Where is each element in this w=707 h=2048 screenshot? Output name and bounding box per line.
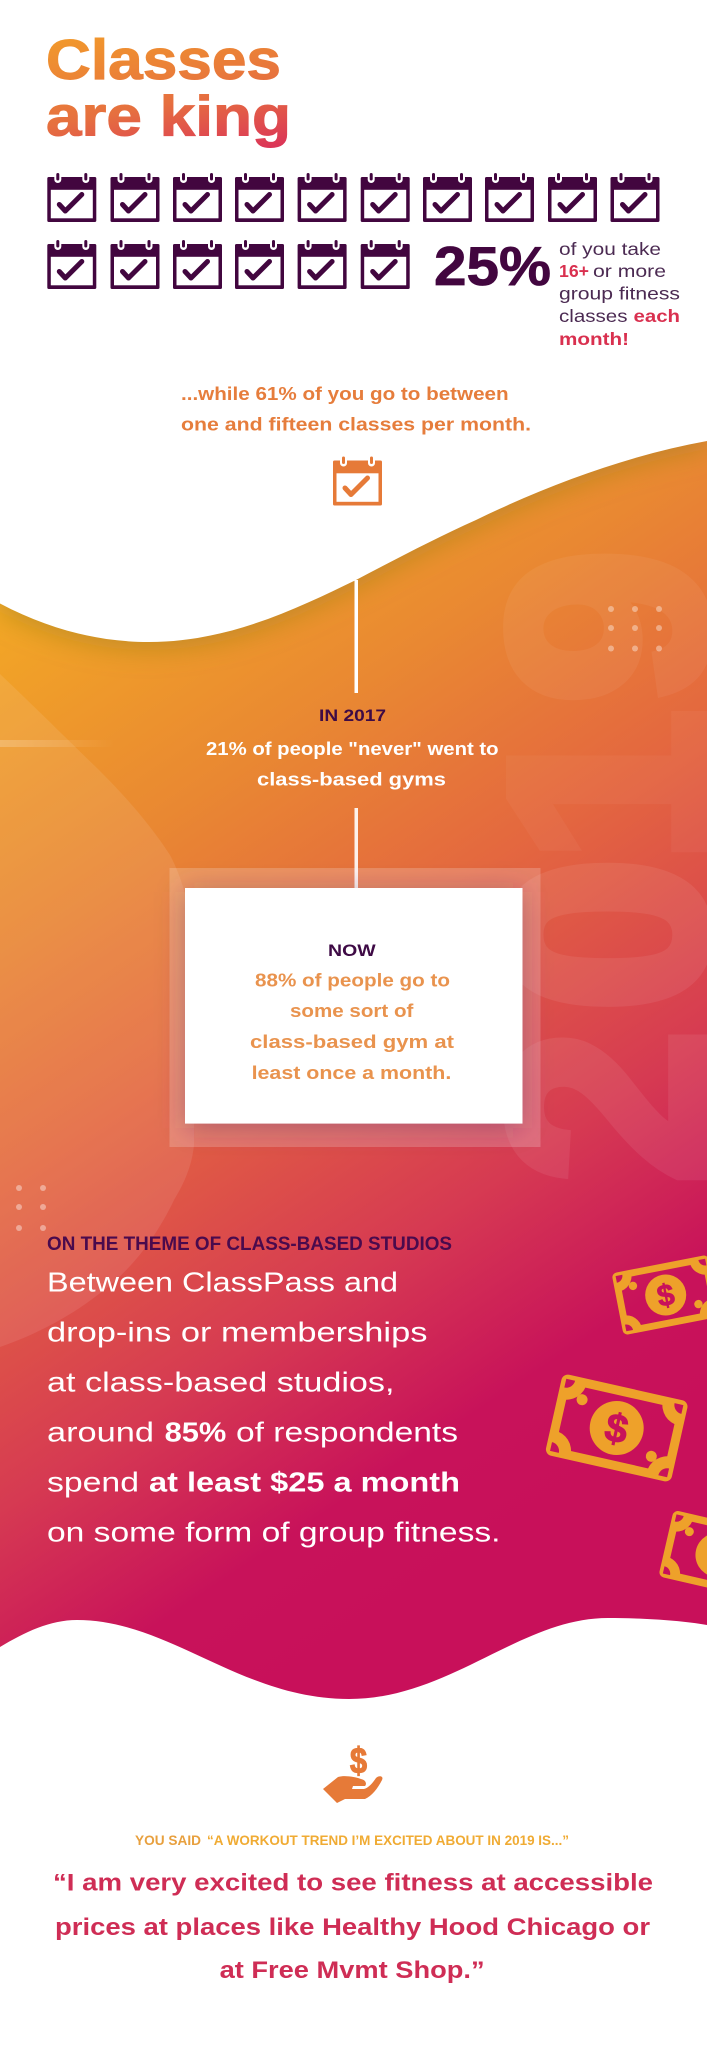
text block: 25% description: each (634, 306, 680, 326)
icon: orange calendar (333, 456, 382, 506)
text block: 25% description: month! (559, 329, 629, 349)
icon: hand with dollar: $ (350, 1740, 367, 1781)
panel: gradient background (0, 408, 707, 1720)
icon: money bill top: $ (654, 1277, 677, 1314)
text block: in 2017: class-based gyms (257, 770, 446, 790)
text block: spending (47, 1267, 500, 1548)
text block: spending: on some form of group fitness. (47, 1517, 500, 1548)
text block: 61% statement: one and fifteen classes per month. (181, 415, 531, 435)
text block: spending: Between ClassPass and (47, 1267, 398, 1298)
panel: now card: least once a month. (252, 1063, 451, 1083)
translucent left blob (0, 674, 194, 1347)
title (46, 28, 291, 148)
title: are king (46, 84, 291, 148)
quote: “I am very excited to see fitness at accessible (53, 1870, 653, 1897)
icon: money bill top (616, 1259, 707, 1331)
text block: spending: drop-ins or memberships (47, 1317, 427, 1348)
quote: prices at places like Healthy Hood Chicago or (55, 1914, 651, 1941)
text block: spending: at class-based studios, (47, 1367, 395, 1398)
text block: 25% description: group fitness (559, 284, 680, 304)
panel: now card: NOW (328, 941, 377, 960)
text block: 61% statement (181, 384, 531, 435)
label: you said: YOU SAID (135, 1832, 201, 1848)
text block: 25% description (559, 239, 680, 349)
text block: spending: 85% (165, 1417, 226, 1448)
label: you said: “A WORKOUT TREND I’M EXCITED ABOUT IN 2019 IS...” (207, 1832, 569, 1848)
text block: in 2017 (206, 707, 499, 790)
quote: at Free Mvmt Shop.” (220, 1957, 485, 1984)
heading: on the theme: ON THE THEME OF CLASS-BASED STUDIOS (47, 1234, 452, 1255)
icon: money bill middle (550, 1379, 683, 1477)
dots left (16, 1185, 46, 1231)
panel: now card: 88% of people go to (255, 970, 450, 990)
title: Classes (46, 28, 281, 92)
dots top right (608, 606, 662, 652)
panel: now card: class-based gym at (250, 1032, 454, 1052)
icons: calendar row 2 (47, 240, 410, 289)
white top wave area (0, 0, 707, 642)
icon: money bill bottom (663, 1514, 707, 1596)
connector line top (354, 580, 358, 693)
panel: now card (170, 868, 540, 1147)
panel: now card: some sort of (290, 1001, 415, 1021)
text block: 25% description: or more (593, 261, 666, 281)
text block: 61% statement: ...while 61% of you go to between (181, 384, 509, 404)
ghost year 2019 (450, 548, 707, 1185)
text block: 25% description: of you take (559, 239, 661, 259)
wave shadow (0, 408, 707, 650)
text block: in 2017: 21% of people "never" went to (206, 739, 499, 759)
text block: spending: at least $25 a month (149, 1467, 460, 1498)
text block: spending: spend (47, 1467, 139, 1498)
quote (53, 1870, 653, 1984)
icons: calendar row 1 (47, 173, 660, 222)
connector line bottom (354, 808, 358, 888)
stat: 25%: 25% (434, 235, 551, 297)
icon: money bill middle: $ (601, 1405, 632, 1453)
light streak (0, 740, 115, 747)
text block: spending: around (47, 1417, 154, 1448)
icon: hand with dollar (323, 1740, 382, 1803)
text block: spending: of respondents (236, 1417, 458, 1448)
text block: 25% description: classes (559, 306, 628, 326)
text block: 25% description: 16+ (559, 261, 589, 281)
white bottom wave area (0, 1618, 707, 2048)
text block: in 2017: IN 2017 (319, 707, 386, 725)
